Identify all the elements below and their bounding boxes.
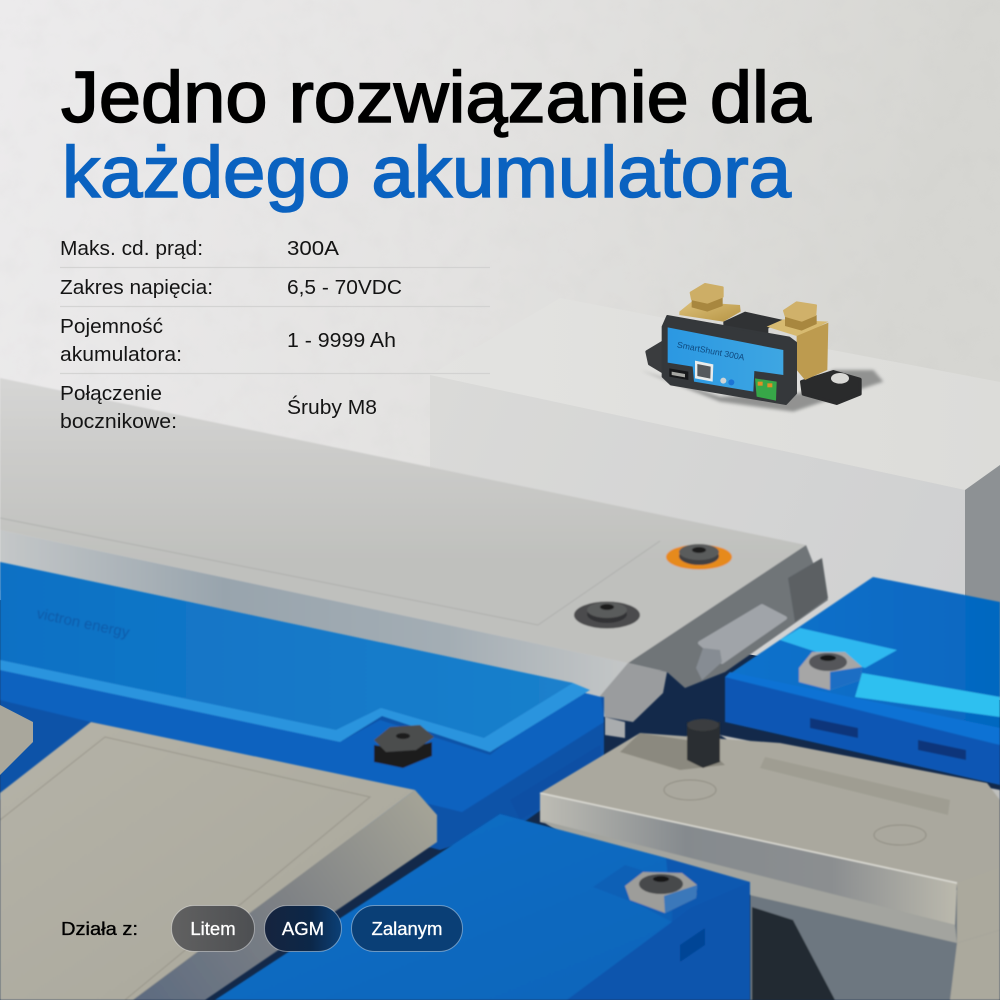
terminal: positive with orange ring xyxy=(666,544,732,570)
row: battery capacity xyxy=(60,316,396,366)
wall texture xyxy=(0,0,1000,520)
title line 1: Jedno rozwiązanie dla xyxy=(61,58,812,138)
black post xyxy=(687,719,720,768)
cyan stripes xyxy=(780,628,1000,717)
row: voltage range xyxy=(60,277,402,299)
title xyxy=(61,58,812,213)
chip: Zalanym xyxy=(352,906,462,952)
embossed brand: victron energy xyxy=(35,605,131,642)
dark base under the batteries xyxy=(0,600,1000,1000)
concrete block xyxy=(430,298,1000,700)
row: shunt connection xyxy=(60,383,377,433)
terminal: negative with dark ring xyxy=(574,602,640,628)
row: shunt connection: bocznikowe: xyxy=(60,411,177,433)
metal nut xyxy=(625,872,697,913)
product: SmartShunt 300A: SmartShunt 300A xyxy=(676,339,745,362)
chip: Litem: Litem xyxy=(190,918,236,939)
row: voltage range: Zakres napięcia: xyxy=(60,277,213,299)
chip: Litem xyxy=(172,906,254,952)
title line 2: każdego akumulatora xyxy=(62,133,792,213)
row: voltage range: 6,5 - 70VDC xyxy=(287,277,402,299)
row: battery capacity: Pojemność xyxy=(60,316,163,338)
row: max continuous current xyxy=(60,238,340,260)
row: shunt connection: Śruby M8 xyxy=(287,395,377,419)
blue battery front bottom xyxy=(215,814,750,1000)
metal nut xyxy=(799,652,862,690)
chip: AGM: AGM xyxy=(282,918,324,939)
chip: AGM xyxy=(264,906,342,952)
row: max continuous current: Maks. cd. prąd: xyxy=(60,238,203,260)
row: max continuous current: 300A xyxy=(287,238,340,260)
blue battery on the right xyxy=(725,577,1000,785)
row: battery capacity: akumulatora: xyxy=(60,344,182,366)
product: SmartShunt 300A xyxy=(640,284,883,412)
compatibility label: Działa z: xyxy=(61,919,138,939)
blue battery in the middle xyxy=(0,562,604,850)
row: shunt connection: Połączenie xyxy=(60,383,162,405)
grey battery xyxy=(0,378,828,738)
chip: Zalanym: Zalanym xyxy=(372,918,442,939)
small beige battery on the left xyxy=(0,705,33,775)
cable xyxy=(696,606,785,680)
hex terminal xyxy=(374,725,434,768)
beige battery on the right xyxy=(540,719,1000,1000)
beige battery front left xyxy=(0,722,437,1000)
row: battery capacity: 1 - 9999 Ah xyxy=(287,330,396,352)
wall background xyxy=(0,0,1000,700)
specification table xyxy=(60,238,490,433)
